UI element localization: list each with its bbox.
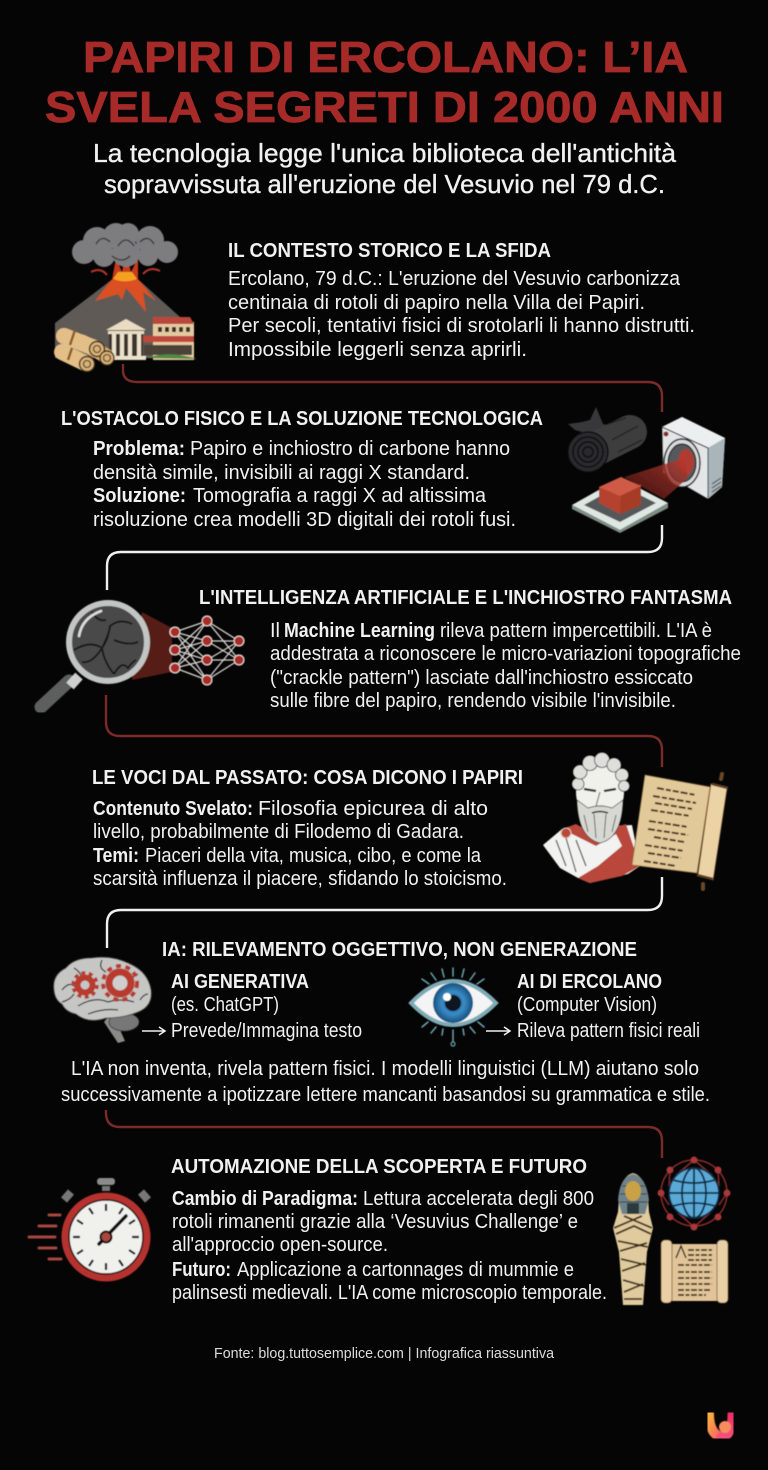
text: section 4: Contenuto Svelato: [93,798,253,820]
text: section 1: Ercolano, 79 d.C.: L'eruzione del Vesuvio carbonizza [228,268,681,290]
text: section 4: Temi: [93,845,139,867]
text: explanation paragraph [61,1058,710,1106]
text: section 3 [270,620,741,712]
icon: carbonized scroll and scanner [568,407,725,533]
text: section 3: sulle fibre del papiro, rendendo visibile l'invisibile. [270,690,676,712]
subtitle: La tecnologia legge l'unica biblioteca dell'antichità [93,138,677,168]
title [45,33,724,132]
text: section 2: Soluzione: [93,485,186,507]
text: section 2 [93,438,516,531]
text: section 1: centinaia di rotoli di papiro nella Villa dei Papiri. [228,292,645,314]
text: section 4: scarsità influenza il piacere, sfidando lo stoicismo. [93,868,507,890]
icon: mummy [613,1173,653,1305]
subtitle [93,138,677,199]
heading: AI generativa: AI GENERATIVA [171,971,309,993]
text: section 6 [172,1188,607,1304]
text: predicts text: Prevede/Immagina testo [171,1020,362,1042]
heading: section 5: IA: RILEVAMENTO OGGETTIVO, NON GENERAZIONE [162,939,637,961]
text: section 2: Problema: [93,438,185,460]
text: explanation paragraph: L'IA non inventa, rivela pattern fisici. I modelli linguistici (LLM) aiutano solo [71,1058,699,1080]
connector: section 5 to 6 [106,1110,662,1158]
icon: globe network [658,1156,730,1230]
icon: volcano, temple and scrolls [55,223,197,372]
heading: section 2: L'OSTACOLO FISICO E LA SOLUZIONE TECNOLOGICA [61,408,543,430]
text: section 6: Futuro: [172,1259,231,1281]
text: section 1: Impossibile leggerli senza aprirli. [228,339,527,361]
icon: palimpsest scroll [661,1240,728,1303]
text: section 6: Lettura accelerata degli 800 [363,1188,594,1210]
heading: section 6: AUTOMAZIONE DELLA SCOPERTA E FUTURO [171,1156,587,1178]
heading: section 3: L'INTELLIGENZA ARTIFICIALE E L'INCHIOSTRO FANTASMA [199,587,732,609]
arrow: Herculaneum AI [486,1027,510,1035]
icon: magnifying glass and neural network [41,603,244,707]
heading: section 1: IL CONTESTO STORICO E LA SFIDA [228,240,551,262]
text: section 2: Tomografia a raggi X ad altissima [193,485,487,507]
logo [709,1414,732,1437]
title: PAPIRI DI ERCOLANO: L’IA [83,33,688,82]
text: section 6: Applicazione a cartonnages di mummie e [237,1259,574,1281]
text: section 4: Filosofia epicurea di alto [258,798,488,820]
icon: stopwatch with speed lines [29,1178,148,1278]
connector: section 3 to 4 [106,695,662,767]
text: section 3: Il [270,620,280,642]
title: SVELA SEGRETI DI 2000 ANNI [45,83,724,132]
text: section 6: all'approccio open-source. [172,1234,388,1256]
connector: section 2 to 3 [107,525,662,590]
text: section 6: Cambio di Paradigma: [172,1188,358,1210]
text: section 1: Per secoli, tentativi fisici di srotolarli li hanno distrutti. [228,315,695,337]
text: detects physical patterns: Rileva pattern fisici reali [517,1020,700,1042]
text: section 3: Machine Learning [284,620,435,642]
footer source: Fonte: blog.tuttosemplice.com | Infografica riassuntiva [214,1346,555,1362]
icon: eye [411,968,496,1046]
heading: AI di Ercolano: AI DI ERCOLANO [517,971,662,993]
text: ChatGPT example: (es. ChatGPT) [171,994,279,1016]
text: section 4: Piaceri della vita, musica, cibo, e come la [145,845,482,867]
text: section 2: risoluzione crea modelli 3D digitali dei rotoli fusi. [93,509,516,531]
connector: section 4 to 5 [107,877,662,948]
text: section 2: densità simile, invisibili ai raggi X standard. [93,462,470,484]
text: section 1 [228,268,695,361]
text: section 6: palinsesti medievali. L'IA come microscopio temporale. [172,1282,607,1304]
text: section 3: addestrata a riconoscere le micro-variazioni topografiche [270,643,741,665]
icon: brain with gears [54,957,151,1043]
text: section 4 [93,798,507,890]
heading: section 4: LE VOCI DAL PASSATO: COSA DICONO I PAPIRI [92,767,523,789]
arrow: generative AI [142,1027,165,1035]
text: section 2: Papiro e inchiostro di carbone hanno [190,438,510,460]
icon: philosopher bust and papyrus scroll [543,752,728,889]
text: section 4: livello, probabilmente di Filodemo di Gadara. [93,821,464,843]
text: section 3: rileva pattern impercettibili. L'IA è [440,620,712,642]
subtitle: sopravvissuta all'eruzione del Vesuvio nel 79 d.C. [104,169,665,199]
text: explanation paragraph: successivamente a ipotizzare lettere mancanti basandosi su grammatica e stile. [61,1084,710,1106]
text: section 3: ("crackle pattern") lasciate dall'inchiostro essiccato [270,667,693,689]
text: Computer Vision: (Computer Vision) [517,994,657,1016]
text: section 6: rotoli rimanenti grazie alla ‘Vesuvius Challenge’ e [172,1211,578,1233]
connector: section 1 to 2 [123,364,662,412]
